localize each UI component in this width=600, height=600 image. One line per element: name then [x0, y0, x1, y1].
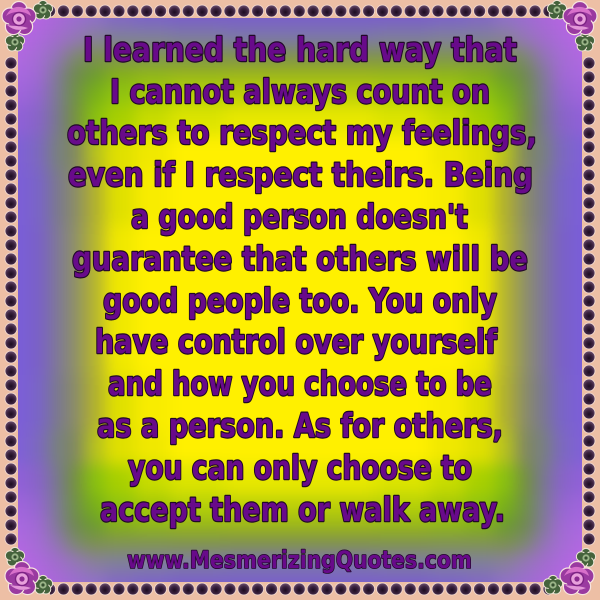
icon: bottom-right roses	[543, 548, 596, 595]
website footer: www.MesmerizingQuotes.com	[127, 546, 472, 574]
quote text: as a person. As for others,	[97, 406, 503, 445]
quote text: have control over yourself	[95, 322, 498, 361]
quote text: I learned the hard way that	[83, 30, 517, 69]
quote text: you can only choose to	[128, 448, 472, 487]
icon: top-left roses	[2, 0, 53, 51]
quote text: a good person doesn't	[131, 197, 468, 236]
quote text: accept them or walk away.	[100, 490, 505, 529]
quote text: I cannot always count on	[110, 72, 490, 111]
icon: top-right roses	[547, 0, 597, 51]
quote text	[67, 30, 537, 529]
icon: bottom-left roses	[5, 547, 53, 595]
quote text: good people too. You only	[103, 281, 497, 320]
quote text: and how you choose to be	[108, 364, 492, 403]
